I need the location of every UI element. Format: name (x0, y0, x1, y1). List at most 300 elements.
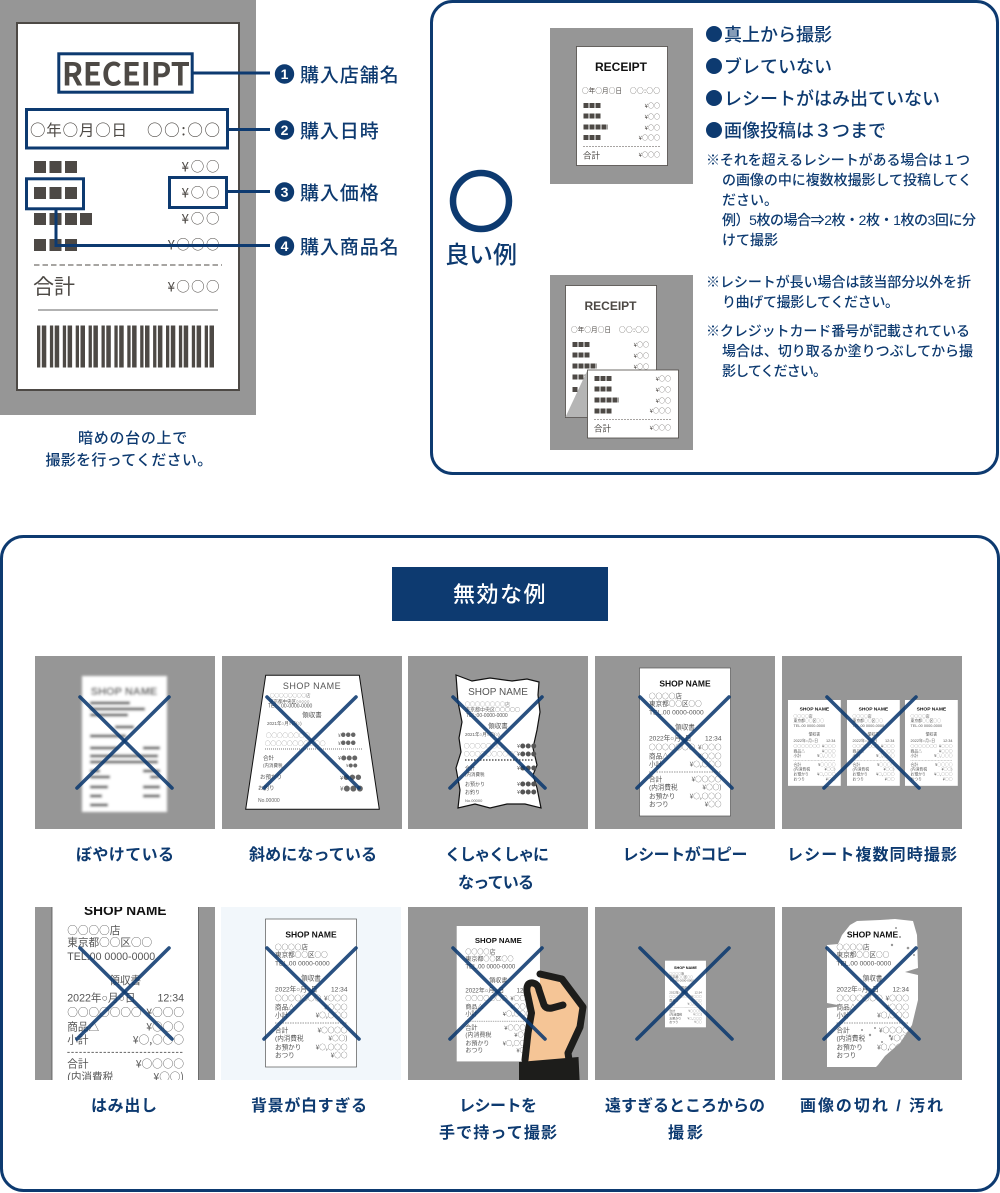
photo: folded receipt: ○年○月○日 (571, 324, 611, 334)
example: torn or dirty: 商品△ (836, 1002, 857, 1012)
example: skewed (222, 656, 402, 864)
label: レシートを (459, 1097, 537, 1115)
label 3: price: 3 (281, 184, 289, 200)
example: photocopy: ¥○○ (705, 798, 722, 808)
example: multiple receipts: 12:34 (826, 739, 836, 743)
example: multiple receipts: 12:34 (943, 739, 953, 743)
label: はみ出し (91, 1097, 157, 1115)
example: multiple receipts: お預かり (853, 772, 868, 777)
example: multiple receipts: ¥○○) (825, 766, 836, 772)
example: multiple receipts: 領収書 (868, 732, 879, 737)
example: blurred: SHOP NAME (91, 686, 157, 698)
note: image limit: けて撮影 (722, 232, 778, 248)
example: crumpled: No.00000 (465, 798, 483, 803)
example: background too white: (内消費税 (275, 1034, 304, 1042)
example: multiple receipts: ¥○,○○○ (876, 772, 895, 778)
example: multiple receipts: ○○○○店 (853, 714, 872, 720)
example: background too white: 領収書 (301, 974, 321, 982)
example: crumpled: ¥●●● (517, 788, 537, 796)
example: cut off: ¥○○○ (146, 1005, 184, 1020)
example: too far away: ¥○○) (693, 1011, 702, 1016)
example: held in hand: 小計 (465, 1010, 477, 1018)
example: background too white: お預かり (275, 1042, 301, 1052)
example: multiple receipts: ¥○○○ (822, 748, 836, 754)
example: cut off (35, 907, 215, 1113)
example: cut off: 12:34 (157, 993, 184, 1005)
checklist: 画像投稿は３つまで (724, 121, 886, 141)
example: multiple receipts: ¥○○○ (939, 743, 953, 749)
example: background too white: 商品△ (275, 1002, 295, 1012)
photo: folded receipt: ¥○○ (656, 396, 671, 405)
example: photocopy: 商品△ (649, 752, 669, 760)
label 3: price: 購入価格 (300, 182, 380, 204)
example: skewed: 合計 (263, 754, 275, 762)
example: cut off: 領収書 (109, 974, 142, 987)
example: multiple receipts: 2022年○月○日 (853, 738, 877, 743)
example: skewed: ¥●●● (338, 754, 358, 762)
example: multiple receipts: ¥○,○○○ (934, 753, 953, 759)
example: background too white: ¥○○○ (324, 992, 348, 1002)
item prices: ¥○○ (182, 208, 220, 228)
example: multiple receipts: ¥○○ (826, 776, 836, 782)
example: multiple receipts: 合計 (911, 762, 918, 767)
photo: folded receipt (550, 275, 693, 450)
example: torn or dirty (782, 907, 962, 1115)
example: multiple receipts: ¥○,○○○ (817, 772, 836, 778)
example: background too white: ○○○○○○○ (275, 992, 322, 1002)
example: multiple receipts: ○○○○○○○ (794, 743, 820, 749)
receipt date: ○年○月○日 (30, 118, 127, 140)
example: background too white (221, 907, 401, 1115)
example: crumpled: なっている (458, 874, 534, 892)
example: multiple receipts: ¥○,○○○ (817, 753, 836, 759)
example: torn or dirty: (内消費税 (836, 1034, 865, 1042)
example: multiple receipts: SHOP NAME (859, 707, 889, 713)
example: held in hand: おつり (465, 1048, 483, 1055)
example: background too white: ¥○○) (328, 1032, 348, 1042)
label 1: store name: 1 (281, 66, 289, 82)
example: cut off: ○○○○店 (67, 923, 121, 938)
example: skewed: ¥●●● (338, 740, 356, 747)
example: held in hand (408, 907, 588, 1142)
example: multiple receipts: ¥○○○ (881, 748, 895, 754)
example: crumpled: ¥●●● (517, 750, 537, 758)
example: crumpled: お預かり (465, 781, 485, 788)
item name squares (34, 161, 92, 251)
receipt time: ○○:○○ (147, 118, 220, 140)
example: multiple receipts: 商品△ (794, 748, 805, 753)
example: multiple receipts: (内消費税 (853, 766, 869, 771)
example: photocopy: おつり (649, 800, 669, 808)
example: too far away: 東京都○○区○○ (669, 974, 693, 979)
example: torn or dirty: ¥○○) (890, 1032, 909, 1042)
item prices: ¥○○ (182, 156, 220, 176)
example: cut off: ¥○,○○○ (133, 1033, 184, 1048)
checklist: 真上から撮影 (724, 25, 832, 45)
example: too far away: おつり (669, 1019, 678, 1024)
example: held in hand: ○○○○店 (465, 947, 495, 956)
example: multiple receipts: 小計 (853, 753, 860, 758)
example: held in hand: TEL.00 0000-0000 (465, 965, 516, 971)
example: multiple receipts: ○○○○○○○ (911, 743, 937, 749)
example: multiple receipts: TEL.00 0000-0000 (794, 724, 825, 728)
example: torn or dirty: 東京都○○区○○ (836, 949, 890, 959)
example: cut off: ¥○○○○ (136, 1057, 184, 1072)
example: multiple receipts: ¥○○○○ (818, 762, 836, 768)
example: skewed: ○○○○○○○○ (266, 732, 311, 740)
example: skewed: ¥●● (346, 763, 358, 769)
example: photocopy: ¥○○) (702, 782, 722, 792)
example: multiple receipts: (内消費税 (794, 766, 810, 771)
example: cut off: 合計 (67, 1058, 89, 1071)
example: cut off: ¥○○○ (146, 1020, 184, 1035)
example: too far away: TEL.00 0000-0000 (669, 979, 694, 983)
heading: good example: 良い例 (445, 242, 517, 269)
caption: dark table note: 撮影を行ってください。 (45, 451, 213, 469)
example: torn or dirty: おつり (836, 1052, 856, 1060)
photo: folded receipt: RECEIPT (584, 299, 637, 313)
photo: correct receipt: ¥○○ (645, 123, 660, 132)
example: held in hand: 合計 (465, 1024, 477, 1032)
example: too far away: ¥○○○ (691, 993, 702, 998)
example: skewed: ¥●●● (338, 732, 356, 739)
example: cut off: ¥○○) (153, 1070, 184, 1085)
example: crumpled: ¥●●● (517, 764, 537, 772)
example: multiple receipts: ○○○○店 (794, 714, 813, 720)
example: multiple receipts: ¥○○○ (822, 743, 836, 749)
label 2: date and time: 購入日時 (300, 120, 380, 142)
example: background too white: TEL.00 0000-0000 (275, 960, 330, 968)
example: photocopy: ○○○○店 (649, 690, 682, 700)
example: multiple receipts: 2022年○月○日 (794, 738, 818, 743)
example: skewed: 2021年○月○日(○) (267, 720, 302, 727)
example: held in hand: 東京都○○区○○ (465, 954, 514, 963)
example: multiple receipts: TEL.00 0000-0000 (853, 724, 884, 728)
example: skewed: お預かり (260, 773, 282, 781)
example: multiple receipts: TEL.00 0000-0000 (911, 724, 942, 728)
note: image limit (706, 152, 976, 248)
example: too far away: 商品△ (669, 997, 678, 1002)
note: image limit: ※それを超えるレシートがある場合は１つ (706, 152, 970, 168)
example: cut off: TEL.00 0000-0000 (67, 951, 155, 963)
example: skewed: 東京都中央区○○○○○ (269, 698, 310, 705)
example: multiple receipts: ○○○○○○○ (853, 743, 879, 749)
example: held in hand: SHOP NAME (475, 936, 522, 945)
example: multiple receipts (782, 656, 962, 864)
example: too far away: 2022年○月○日 (669, 989, 688, 994)
example: photocopy: ¥○○○ (698, 742, 722, 752)
example: crumpled: (内消費税 (465, 771, 485, 778)
example: multiple receipts: 小計 (794, 753, 801, 758)
example: skewed: お釣り (258, 784, 275, 792)
example: crumpled: ¥●●● (517, 742, 537, 750)
example: crumpled: ○○○○○○○○店 (465, 701, 510, 708)
example: multiple receipts: 領収書 (926, 732, 937, 737)
photo background (0, 0, 256, 415)
total price: ¥○○○ (168, 276, 220, 296)
label 2: date and time: 2 (281, 122, 289, 138)
heading: invalid examples: 無効な例 (453, 582, 547, 607)
photo: correct receipt: ¥○○ (645, 112, 660, 121)
example: torn or dirty: ○○○○店 (836, 942, 870, 952)
example: too far away: 領収書 (681, 984, 690, 989)
example: background too white: SHOP NAME (285, 930, 337, 940)
example: skewed: (内消費税 (263, 762, 283, 769)
icon: hand (519, 974, 583, 1080)
example: photocopy: 領収書 (675, 722, 695, 732)
photo: folded receipt: ¥○○○ (650, 406, 671, 415)
example: torn or dirty: ¥○○○○ (879, 1024, 909, 1034)
item prices (168, 156, 220, 254)
note: long receipts (706, 274, 971, 310)
example: multiple receipts: ¥○○ (885, 776, 895, 782)
leader lines (56, 73, 270, 246)
checklist (706, 25, 940, 141)
example: multiple receipts: ¥○○○○ (935, 762, 953, 768)
example: multiple receipts: ¥○○ (943, 776, 953, 782)
example: multiple receipts: 商品△ (853, 748, 864, 753)
photo: correct receipt: RECEIPT (595, 60, 648, 74)
label: 背景が白すぎる (251, 1096, 367, 1115)
example: cut off: (内消費税 (67, 1071, 114, 1084)
example: photocopy: 12:34 (705, 736, 722, 742)
example: photocopy: 小計 (649, 760, 663, 768)
example: multiple receipts: 合計 (853, 762, 860, 767)
note: credit card numbers: 影してください。 (722, 363, 827, 379)
example: multiple receipts: ○○○○店 (911, 714, 930, 720)
highlight: item (26, 179, 84, 209)
photo: folded receipt: ¥○○○ (650, 423, 671, 432)
label: レシート複数同時撮影 (787, 845, 957, 864)
example: cut off: 小計 (67, 1035, 89, 1047)
example: too far away: ○○○○○○○ (669, 993, 690, 998)
example: multiple receipts: お預かり (911, 772, 926, 777)
example: torn or dirty: ○○○○○○○ (836, 992, 883, 1002)
example: held in hand: ¥○,○○○ (503, 1038, 532, 1047)
example: photocopy: ¥○,○○○ (690, 790, 722, 800)
example: too far away (595, 907, 775, 1142)
total label: 合計 (33, 276, 75, 299)
photo: correct receipt: ○○:○○ (630, 85, 660, 95)
cross marks (77, 697, 919, 1039)
example: multiple receipts: 東京都○○区○○ (794, 718, 824, 724)
example: crumpled: 領収書 (488, 721, 508, 730)
example: skewed: SHOP NAME (283, 681, 341, 691)
example: crumpled: TEL:00-0000-0000 (466, 713, 508, 719)
example: too far away: ¥○,○○○ (688, 1015, 702, 1020)
example: blurred (35, 656, 215, 864)
example: background too white: 12:34 (331, 986, 348, 994)
label: レシートがコピー (622, 845, 748, 864)
item prices: ¥○○○ (168, 234, 220, 254)
example: skewed: ○○○○○○○○○○○ (265, 740, 326, 748)
example: too far away: ○○○○店 (669, 970, 684, 975)
example: multiple receipts: ¥○○○ (939, 748, 953, 754)
example: skewed: ¥●●● (340, 773, 361, 782)
example: too far away: ¥○○○ (691, 997, 702, 1002)
checklist: レシートがはみ出ていない (724, 88, 940, 109)
example: cut off: SHOP NAME (84, 903, 167, 918)
photo: folded receipt: ¥○○ (656, 374, 671, 383)
example: too far away: ¥○○○○ (688, 1008, 702, 1013)
receipt paper (17, 23, 239, 390)
caption: dark table note (45, 430, 213, 469)
label: 斜めになっている (249, 846, 377, 864)
example: photocopy: TEL.00 0000-0000 (649, 710, 704, 716)
example: multiple receipts: ¥○○○ (881, 743, 895, 749)
label: 遠すぎるところからの (605, 1096, 765, 1115)
item prices: ¥○○ (182, 182, 220, 202)
example: held in hand: 2022年○月○日 (465, 986, 504, 994)
example: torn or dirty: ¥○,○○○ (877, 1042, 909, 1052)
example: held in hand: 12:34 (517, 988, 532, 994)
panel: receipt anatomy (0, 0, 400, 415)
photo: folded receipt: ¥○○ (634, 340, 649, 349)
example: multiple receipts: ¥○○) (942, 766, 953, 772)
example: held in hand: 領収書 (489, 976, 507, 984)
label 4: product name: 購入商品名 (300, 236, 400, 258)
photo: folded receipt: ¥○○ (634, 351, 649, 360)
example: too far away: 12:34 (694, 990, 702, 994)
note: image limit: ださい。 (722, 192, 778, 208)
example: background too white: ¥○,○○○ (316, 1042, 348, 1052)
example: too far away: お預かり (669, 1015, 681, 1020)
example: torn or dirty: 2022年○月○日 (836, 984, 879, 994)
label 4: product name: 4 (281, 238, 289, 254)
example: held in hand: ¥○○○ (510, 994, 532, 1003)
example: multiple receipts: おつり (911, 776, 922, 781)
example: crumpled: ○○○○○○○○○○ (464, 750, 520, 758)
example: skewed: ¥●●● (340, 783, 364, 793)
example: held in hand: ¥○○) (514, 1030, 532, 1039)
example: multiple receipts: 2022年○月○日 (911, 738, 935, 743)
example: crumpled: ○○○○○○○ (464, 742, 503, 750)
panel: good example (432, 2, 998, 474)
example: background too white: 小計 (275, 1010, 289, 1020)
example: crumpled (408, 656, 588, 892)
example: multiple receipts: ¥○○) (884, 766, 895, 772)
example: torn or dirty: 小計 (836, 1010, 850, 1020)
example: multiple receipts: おつり (853, 776, 864, 781)
checklist: ブレていない (724, 56, 832, 77)
example: skewed: 領収書 (302, 710, 322, 719)
example: photocopy: 合計 (649, 774, 663, 784)
example: multiple receipts: 商品△ (911, 748, 922, 753)
example: held in hand: ¥○○○ (510, 1002, 532, 1011)
example: torn or dirty: TEL.00 0000-0000 (836, 960, 891, 968)
example: held in hand: ○○○○○○○ (465, 994, 508, 1003)
example: cut off: ○○○○○○○ (67, 1005, 142, 1020)
example: held in hand: 手で持って撮影 (439, 1123, 557, 1142)
example: torn or dirty: SHOP NAME (847, 930, 898, 940)
note: credit card numbers: ※クレジットカード番号が記載されている (706, 323, 970, 339)
example: multiple receipts: ¥○○○○ (877, 762, 895, 768)
example: multiple receipts: SHOP NAME (800, 707, 830, 713)
photo: folded receipt: ¥○○ (634, 362, 649, 371)
caption: dark table note: 暗めの台の上で (78, 430, 188, 447)
highlight: store name (59, 54, 192, 92)
fold shadow (566, 370, 588, 417)
note: credit card numbers: 場合は、切り取るか塗りつぶしてから撮 (722, 343, 973, 359)
example: too far away: ¥○,○○○ (688, 1001, 702, 1006)
label: くしゃくしゃに (445, 846, 549, 864)
label: 画像の切れ / 汚れ (800, 1097, 943, 1115)
example: photocopy: ¥○○○○ (691, 774, 722, 784)
example: multiple receipts: SHOP NAME (917, 707, 947, 713)
note: image limit: 例）5枚の場合⇒2枚・2枚・1枚の3回に分 (722, 212, 976, 228)
photo: folded receipt: 合計 (594, 424, 612, 434)
example: photocopy: (内消費税 (649, 782, 678, 792)
example: background too white: 東京都○○区○○ (275, 949, 328, 959)
example: photocopy: ¥○○○ (698, 750, 722, 760)
barcode (37, 326, 217, 368)
example: too far away: (内消費税 (669, 1011, 682, 1016)
example: multiple receipts: 小計 (911, 753, 918, 758)
panel: invalid examples (2, 536, 998, 1190)
label 1: store name: 購入店舗名 (300, 64, 400, 86)
folded part (588, 370, 678, 438)
example: torn or dirty: ¥○○○ (886, 1002, 909, 1012)
example: too far away: 撮影 (668, 1123, 703, 1142)
photo: correct receipt: ○年○月○日 (582, 85, 622, 95)
example: crumpled: 東京都中央区○○○○○ (465, 706, 520, 714)
example: photocopy: 2022年○月○日 (649, 734, 691, 742)
example: skewed: No.00000 (258, 798, 280, 804)
example: multiple receipts: 12:34 (885, 739, 895, 743)
note: credit card numbers (706, 323, 973, 379)
example: background too white: ¥○○○ (324, 1002, 348, 1012)
example: multiple receipts: おつり (794, 776, 805, 781)
example: cut off: 2022年○月○日 (67, 992, 136, 1005)
photo: correct receipt: 合計 (583, 150, 601, 160)
example: crumpled: ¥●●● (517, 780, 537, 788)
example: torn or dirty: お預かり (836, 1042, 863, 1052)
example: background too white: ○○○○店 (275, 942, 308, 952)
example: too far away: SHOP NAME (674, 966, 697, 970)
highlight: date and time (26, 110, 228, 148)
example: background too white: 合計 (275, 1026, 289, 1034)
photo: correct receipt: ¥○○○ (639, 150, 660, 159)
label: ぼやけている (76, 846, 174, 864)
example: torn or dirty: 12:34 (892, 986, 909, 994)
highlight: price (170, 178, 226, 208)
example: torn or dirty: ¥○,○○○ (877, 1010, 909, 1020)
example: background too white: ¥○,○○○ (316, 1010, 348, 1020)
example: held in hand: (内消費税 (465, 1031, 491, 1039)
example: cut off: 東京都○○区○○ (67, 935, 153, 950)
example: photocopy (595, 656, 775, 864)
example: multiple receipts: ¥○,○○○ (934, 772, 953, 778)
example: held in hand: お預かり (465, 1039, 489, 1047)
example: multiple receipts: (内消費税 (911, 766, 927, 771)
example: background too white: ¥○○○○ (317, 1024, 348, 1034)
example: too far away: ¥○○ (694, 1019, 702, 1024)
example: multiple receipts: 領収書 (809, 732, 820, 737)
example: crumpled: 合計 (465, 765, 475, 772)
note: long receipts: ※レシートが長い場合は該当部分以外を折 (706, 274, 971, 290)
example: too far away: 小計 (669, 1001, 675, 1006)
example: held in hand: ¥○○○○ (504, 1023, 532, 1032)
example: photocopy: お預かり (649, 792, 675, 800)
example: multiple receipts: 東京都○○区○○ (911, 718, 941, 724)
example: photocopy: 東京都○○区○○ (649, 698, 702, 708)
example: held in hand: 商品△ (465, 1003, 483, 1011)
example: cut off: 商品△ (67, 1021, 100, 1034)
example: background too white: おつり (275, 1052, 295, 1060)
example: held in hand: ¥○○ (516, 1046, 532, 1055)
example: background too white: 2022年○月○日 (275, 984, 317, 994)
example: torn or dirty: ¥○○○ (886, 992, 909, 1002)
